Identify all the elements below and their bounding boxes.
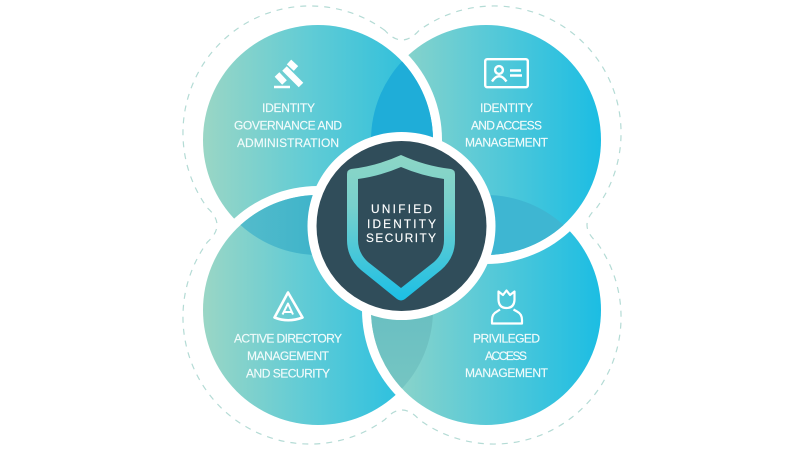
label: privileged access management: ACCESS — [485, 349, 527, 363]
label: identity governance and administration: GOVERNANCE AND — [234, 118, 342, 132]
panel: identity governance and administration circle — [203, 25, 433, 255]
center title — [366, 202, 436, 245]
panel: identity and access management circle — [408, 25, 601, 264]
label: privileged access management — [465, 332, 549, 380]
center title: UNIFIED — [371, 202, 432, 216]
label: identity and access management: AND ACCESS — [471, 118, 542, 132]
center circle — [308, 132, 496, 320]
label: identity and access management: MANAGEMENT — [465, 136, 549, 150]
label: active directory management and security: MANAGEMENT — [247, 349, 330, 363]
label: identity governance and administration — [234, 101, 342, 150]
panel: active directory circle — [203, 186, 396, 425]
label: active directory management and security — [234, 332, 342, 380]
label: privileged access management: PRIVILEGED — [473, 332, 540, 346]
label: privileged access management: MANAGEMENT — [465, 366, 549, 380]
icon: crowned user — [492, 290, 522, 324]
label: identity and access management: IDENTITY — [480, 101, 533, 115]
overlap: governance over access — [362, 55, 442, 142]
shield icon — [347, 155, 455, 300]
label: active directory management and security: ACTIVE DIRECTORY — [234, 332, 342, 346]
label: active directory management and security: AND SECURITY — [246, 366, 330, 380]
dashed outline — [183, 6, 621, 444]
label: identity and access management — [465, 101, 549, 150]
label: identity governance and administration: ADMINISTRATION — [237, 136, 339, 150]
center title: IDENTITY — [367, 217, 436, 231]
icon: identity card — [485, 59, 528, 87]
icon: active directory triangle — [274, 292, 302, 320]
panel: privileged access circle — [362, 231, 601, 425]
label: identity governance and administration: IDENTITY — [262, 101, 315, 115]
center title: SECURITY — [366, 231, 436, 245]
icon: gavel — [274, 62, 301, 87]
